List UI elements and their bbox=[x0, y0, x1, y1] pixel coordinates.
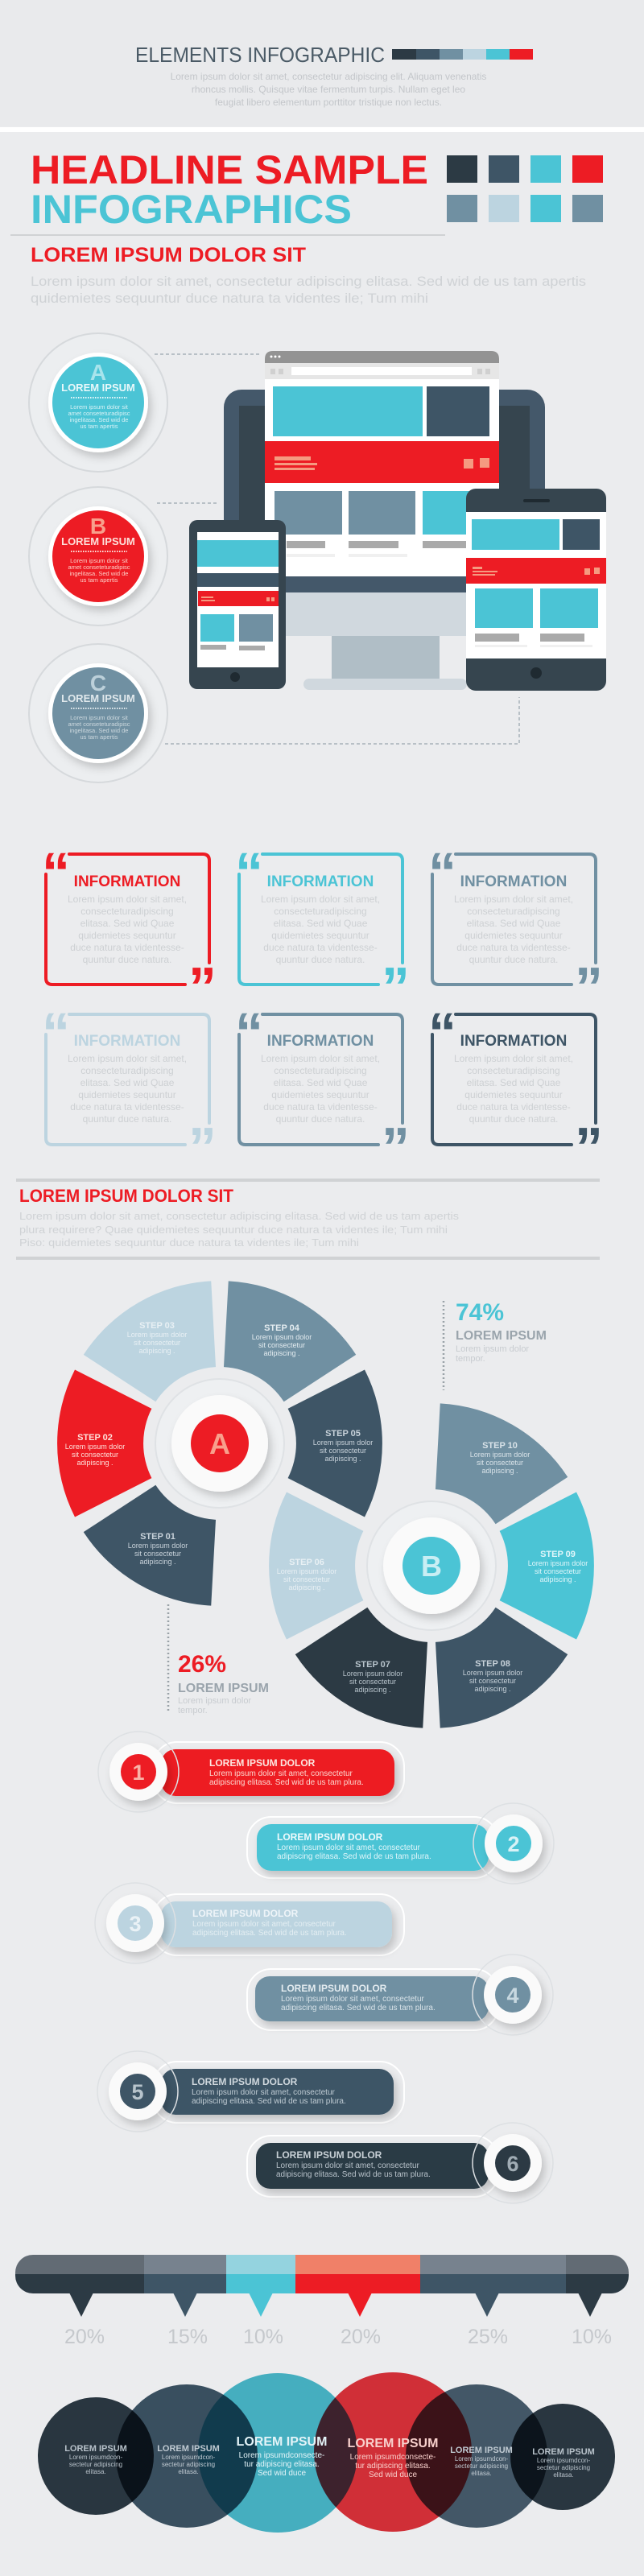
bar 2: 2 bbox=[507, 1832, 520, 1856]
circle C: C bbox=[90, 671, 106, 696]
quote box 1: Lorem ipsum dolor sit amet, bbox=[68, 894, 187, 905]
quote box 2: quidemietes sequuntur bbox=[271, 930, 369, 941]
overlapping circles: tur adipiscing elitasa. bbox=[244, 2460, 320, 2469]
circle C: ingelitasa. Sed wid de bbox=[70, 727, 128, 734]
quote box 6: quuntur duce natura. bbox=[469, 1113, 558, 1125]
overlapping circles: Lorem ipsumdconsecte- bbox=[350, 2453, 436, 2462]
quote box 1: “ bbox=[42, 841, 70, 904]
subheading 1: Lorem ipsum dolor sit amet, consectetur adipiscing elitasa. Sed wid de us tam apertis bbox=[31, 274, 586, 289]
quote box 4: “ bbox=[42, 1001, 70, 1064]
quote box 4: quuntur duce natura. bbox=[83, 1113, 171, 1125]
gear chart A: STEP 05 bbox=[325, 1429, 361, 1439]
header: elements infographic: rhoncus mollis. Quisque vitae fermentum turpis. Nullam eget leo bbox=[192, 84, 465, 95]
bar 3: adipiscing elitasa. Sed wid de us tam plura. bbox=[192, 1929, 347, 1938]
gear chart B: adipiscing . bbox=[481, 1467, 518, 1475]
quote box 6: duce natura ta videntesse- bbox=[456, 1101, 571, 1113]
bar 6: adipiscing elitasa. Sed wid de us tam plura. bbox=[276, 2170, 431, 2179]
title: headline: HEADLINE SAMPLE bbox=[31, 147, 428, 192]
quote box 5 bbox=[235, 1001, 410, 1179]
overlapping circles: Lorem ipsumdcon- bbox=[69, 2454, 122, 2461]
circle B: ingelitasa. Sed wid de bbox=[70, 570, 128, 577]
quote box 5: quuntur duce natura. bbox=[276, 1113, 365, 1125]
bar 1: LOREM IPSUM DOLOR bbox=[209, 1757, 316, 1769]
overlapping circles: LOREM IPSUM bbox=[157, 2444, 220, 2454]
overlapping circles: LOREM IPSUM bbox=[64, 2444, 127, 2454]
monitor bbox=[224, 351, 545, 690]
circle C: amet conseteturadipisc bbox=[68, 720, 130, 728]
quote box 3 bbox=[428, 841, 603, 1018]
subheading 2: Piso: quidemietes sequuntur duce natura ta videntes ile; Tum mihi bbox=[19, 1236, 359, 1249]
subheading 1: quidemietes sequuntur duce natura ta videntes ile; Tum mihi bbox=[31, 291, 428, 306]
quote box 3: Lorem ipsum dolor sit amet, bbox=[454, 894, 573, 905]
quote box 4: quidemietes sequuntur bbox=[78, 1089, 176, 1100]
quote box 5: Lorem ipsum dolor sit amet, bbox=[261, 1053, 380, 1064]
bar 2: Lorem ipsum dolor sit amet, consectetur bbox=[277, 1843, 421, 1852]
bar 5: adipiscing elitasa. Sed wid de us tam plura. bbox=[192, 2097, 346, 2106]
circle A: Lorem ipsum dolor sit bbox=[70, 403, 129, 411]
devices illustration bbox=[189, 351, 606, 691]
gear chart A: A bbox=[209, 1427, 230, 1460]
quote box 3: duce natura ta videntesse- bbox=[456, 942, 571, 953]
gear chart A: Lorem ipsum dolor bbox=[313, 1439, 373, 1447]
connectors bbox=[155, 354, 519, 744]
gear chart A: Lorem ipsum dolor bbox=[252, 1333, 312, 1341]
quote box 6: “ bbox=[428, 1001, 456, 1064]
subheading 2: LOREM IPSUM DOLOR SIT bbox=[19, 1186, 234, 1206]
bar 5: LOREM IPSUM DOLOR bbox=[192, 2076, 298, 2087]
overlapping circles: Sed wid duce bbox=[369, 2471, 417, 2479]
quote box 6: Lorem ipsum dolor sit amet, bbox=[454, 1053, 573, 1064]
gear chart B: STEP 09 bbox=[540, 1550, 576, 1559]
gear chart B: Lorem ipsum dolor bbox=[463, 1669, 522, 1677]
overlapping circles: tur adipiscing elitasa. bbox=[355, 2462, 431, 2471]
gear chart B: sit consectetur bbox=[283, 1575, 330, 1583]
circle A: LOREM IPSUM bbox=[61, 382, 135, 394]
quote box 5: duce natura ta videntesse- bbox=[263, 1101, 378, 1113]
callout 74%: 74% bbox=[456, 1299, 504, 1326]
gear chart A: sit consectetur bbox=[134, 1339, 180, 1347]
bar 2: adipiscing elitasa. Sed wid de us tam plura. bbox=[277, 1852, 431, 1861]
overlapping circles: LOREM IPSUM bbox=[348, 2437, 438, 2450]
gear chart A: STEP 04 bbox=[264, 1323, 300, 1333]
circle A: amet conseteturadipisc bbox=[68, 410, 130, 417]
segmented percentage bar: 25% bbox=[468, 2326, 508, 2348]
quote box 6: consecteturadipiscing bbox=[467, 1065, 560, 1076]
overlapping circles: sectetur adipiscing bbox=[455, 2462, 508, 2470]
gear chart A: adipiscing . bbox=[263, 1349, 300, 1357]
overlapping circles: LOREM IPSUM bbox=[450, 2446, 513, 2455]
gear chart A: Lorem ipsum dolor bbox=[128, 1542, 188, 1550]
quote box 6: ” bbox=[575, 1116, 603, 1179]
quote box 3: quidemietes sequuntur bbox=[464, 930, 563, 941]
bar 3: 3 bbox=[129, 1912, 142, 1936]
gear chart B: STEP 08 bbox=[475, 1659, 510, 1669]
quote box 1 bbox=[42, 841, 217, 1018]
quote box 3: quuntur duce natura. bbox=[469, 954, 558, 965]
phone bbox=[189, 520, 286, 689]
overlapping circles: Sed wid duce bbox=[258, 2469, 306, 2478]
subheading 2: Lorem ipsum dolor sit amet, consectetur adipiscing elitasa. Sed wid de us tam apertis bbox=[19, 1210, 460, 1222]
overlapping circles: Lorem ipsumdcon- bbox=[162, 2454, 215, 2461]
bar 4: adipiscing elitasa. Sed wid de us tam plura. bbox=[281, 2004, 436, 2013]
gear chart A bbox=[57, 1265, 382, 1621]
bar 5: Lorem ipsum dolor sit amet, consectetur bbox=[192, 2088, 336, 2097]
gear chart A: sit consectetur bbox=[320, 1447, 366, 1455]
header: elements infographic: Lorem ipsum dolor sit amet, consectetur adipiscing elit. Aliquam venenatis bbox=[171, 71, 486, 82]
quote boxes bbox=[42, 841, 603, 1179]
quote box 4: Lorem ipsum dolor sit amet, bbox=[68, 1053, 187, 1064]
gear chart A: adipiscing . bbox=[139, 1558, 176, 1566]
gear chart A: sit consectetur bbox=[72, 1451, 118, 1459]
circle A: A bbox=[90, 360, 106, 385]
callout 26%: 26% bbox=[178, 1651, 226, 1678]
quote box 3: “ bbox=[428, 841, 456, 904]
quote box 1: quuntur duce natura. bbox=[83, 954, 171, 965]
overlapping circles: Lorem ipsumdconsecte- bbox=[239, 2451, 324, 2460]
callout 26%: tempor. bbox=[178, 1706, 208, 1715]
bar 4: Lorem ipsum dolor sit amet, consectetur bbox=[281, 1995, 425, 2004]
callout 26%: Lorem ipsum dolor bbox=[178, 1696, 251, 1706]
gear chart A: sit consectetur bbox=[134, 1550, 181, 1558]
gear chart B: sit consectetur bbox=[469, 1677, 516, 1685]
title: headline: INFOGRAPHICS bbox=[31, 187, 352, 232]
overlapping circles: sectetur adipiscing bbox=[162, 2461, 215, 2468]
gear chart A: Lorem ipsum dolor bbox=[127, 1331, 187, 1339]
bar 3: LOREM IPSUM DOLOR bbox=[192, 1908, 299, 1919]
circle A: ingelitasa. Sed wid de bbox=[70, 416, 128, 423]
gear chart B bbox=[269, 1388, 594, 1744]
gear chart A: STEP 01 bbox=[140, 1532, 175, 1542]
header: elements infographic: ELEMENTS INFOGRAPHIC bbox=[135, 43, 385, 67]
gear chart A: STEP 02 bbox=[77, 1433, 113, 1443]
overlapping circles: elitasa. bbox=[85, 2468, 106, 2475]
gear chart B: Lorem ipsum dolor bbox=[528, 1559, 588, 1567]
gear chart B: Lorem ipsum dolor bbox=[343, 1670, 402, 1678]
quote box 1: consecteturadipiscing bbox=[80, 906, 174, 917]
quote box 5: ” bbox=[382, 1116, 410, 1179]
overlapping circles: Lorem ipsumdcon- bbox=[537, 2457, 590, 2464]
quote box 3: INFORMATION bbox=[460, 873, 567, 890]
segmented percentage bar: 10% bbox=[243, 2326, 283, 2348]
bar 4: 4 bbox=[506, 1984, 519, 2008]
bar 6: 6 bbox=[506, 2152, 519, 2176]
circle B: Lorem ipsum dolor sit bbox=[70, 557, 129, 564]
gear chart A: adipiscing . bbox=[324, 1455, 361, 1463]
gear chart B: sit consectetur bbox=[349, 1678, 396, 1686]
quote box 5: “ bbox=[235, 1001, 263, 1064]
quote box 5: elitasa. Sed wid Quae bbox=[274, 1077, 368, 1088]
callout 74%: tempor. bbox=[456, 1354, 485, 1364]
gear chart B: STEP 06 bbox=[289, 1558, 324, 1567]
tablet bbox=[466, 489, 606, 691]
callout 74%: LOREM IPSUM bbox=[456, 1329, 547, 1343]
bar 6: Lorem ipsum dolor sit amet, consectetur bbox=[276, 2161, 420, 2170]
bar 5: 5 bbox=[131, 2080, 144, 2104]
bar 2: LOREM IPSUM DOLOR bbox=[277, 1831, 383, 1843]
subheading 1: LOREM IPSUM DOLOR SIT bbox=[31, 244, 306, 266]
quote box 4: elitasa. Sed wid Quae bbox=[80, 1077, 175, 1088]
bar 6: LOREM IPSUM DOLOR bbox=[276, 2149, 382, 2161]
bar 6 bbox=[247, 2123, 553, 2203]
palette squares bbox=[447, 155, 603, 222]
quote box 6 bbox=[428, 1001, 603, 1179]
quote box 1: quidemietes sequuntur bbox=[78, 930, 176, 941]
gear chart B: adipiscing . bbox=[539, 1575, 576, 1583]
overlapping circles bbox=[38, 2372, 615, 2533]
header: elements infographic: feugiat libero elementum porttitor tristique non lectus. bbox=[215, 97, 442, 108]
callout 26% bbox=[168, 1604, 269, 1715]
header: elements infographic bbox=[135, 43, 533, 108]
gear chart B: Lorem ipsum dolor bbox=[470, 1451, 530, 1459]
quote box 2 bbox=[235, 841, 410, 1018]
segmented percentage bar: 10% bbox=[572, 2326, 612, 2348]
quote box 1: elitasa. Sed wid Quae bbox=[80, 918, 175, 929]
circle C: Lorem ipsum dolor sit bbox=[70, 714, 129, 721]
callout 74% bbox=[444, 1299, 547, 1390]
overlapping circles: Lorem ipsumdcon- bbox=[455, 2455, 508, 2462]
gear chart B: Lorem ipsum dolor bbox=[277, 1567, 336, 1575]
gear chart A: adipiscing . bbox=[138, 1347, 175, 1355]
bar 1: 1 bbox=[132, 1761, 145, 1785]
gear chart B: adipiscing . bbox=[354, 1686, 391, 1694]
segmented percentage bar: 20% bbox=[341, 2326, 381, 2348]
bar 1: Lorem ipsum dolor sit amet, consectetur bbox=[209, 1769, 353, 1778]
overlapping circles: elitasa. bbox=[178, 2468, 199, 2475]
gear chart B: STEP 10 bbox=[482, 1441, 518, 1451]
bar 3 bbox=[95, 1883, 404, 1963]
gear chart B: STEP 07 bbox=[355, 1660, 390, 1670]
overlapping circles: elitasa. bbox=[471, 2470, 492, 2477]
quote box 4 bbox=[42, 1001, 217, 1179]
circle B: us tam apertis bbox=[80, 576, 118, 584]
subheading 1 bbox=[31, 244, 586, 306]
quote box 3: ” bbox=[575, 956, 603, 1018]
quote box 2: INFORMATION bbox=[267, 873, 374, 890]
quote box 3: elitasa. Sed wid Quae bbox=[467, 918, 561, 929]
circle C bbox=[29, 644, 167, 782]
quote box 2: ” bbox=[382, 956, 410, 1018]
overlapping circles: LOREM IPSUM bbox=[532, 2447, 595, 2457]
circle C: us tam apertis bbox=[80, 733, 118, 741]
callout 74%: Lorem ipsum dolor bbox=[456, 1344, 529, 1354]
quote box 4: INFORMATION bbox=[74, 1033, 180, 1050]
numbered bars bbox=[95, 1732, 554, 2203]
quote box 4: consecteturadipiscing bbox=[80, 1065, 174, 1076]
circle B bbox=[29, 487, 167, 625]
bar 5 bbox=[97, 2051, 404, 2132]
quote box 2: consecteturadipiscing bbox=[274, 906, 367, 917]
quote box 2: quuntur duce natura. bbox=[276, 954, 365, 965]
quote box 4: duce natura ta videntesse- bbox=[70, 1101, 184, 1113]
gear chart B: sit consectetur bbox=[535, 1567, 581, 1575]
bar 1 bbox=[98, 1732, 404, 1812]
overlapping circles: sectetur adipiscing bbox=[69, 2461, 122, 2468]
quote box 2: duce natura ta videntesse- bbox=[263, 942, 378, 953]
gear chart B: sit consectetur bbox=[477, 1459, 523, 1467]
quote box 5: quidemietes sequuntur bbox=[271, 1089, 369, 1100]
quote box 2: Lorem ipsum dolor sit amet, bbox=[261, 894, 380, 905]
segmented percentage bar bbox=[15, 2255, 629, 2348]
quote box 5: consecteturadipiscing bbox=[274, 1065, 367, 1076]
overlapping circles: sectetur adipiscing bbox=[537, 2464, 590, 2471]
subheading 2: plura requirere? Quae quidemietes sequuntur duce natura ta videntes ile; Tum mihi bbox=[19, 1224, 448, 1236]
quote box 6: elitasa. Sed wid Quae bbox=[467, 1077, 561, 1088]
circle A: us tam apertis bbox=[80, 423, 118, 430]
quote box 1: ” bbox=[188, 956, 217, 1018]
quote box 3: consecteturadipiscing bbox=[467, 906, 560, 917]
callout 26%: LOREM IPSUM bbox=[178, 1682, 269, 1695]
subheading 2 bbox=[19, 1186, 460, 1249]
bar 1: adipiscing elitasa. Sed wid de us tam plura. bbox=[209, 1778, 364, 1787]
quote box 2: elitasa. Sed wid Quae bbox=[274, 918, 368, 929]
gear chart A: Lorem ipsum dolor bbox=[65, 1443, 125, 1451]
circle C: LOREM IPSUM bbox=[61, 692, 135, 704]
circle B: amet conseteturadipisc bbox=[68, 564, 130, 571]
bar 3: Lorem ipsum dolor sit amet, consectetur bbox=[192, 1920, 336, 1929]
quote box 6: quidemietes sequuntur bbox=[464, 1089, 563, 1100]
title: headline bbox=[31, 147, 428, 232]
quote box 1: duce natura ta videntesse- bbox=[70, 942, 184, 953]
gear chart B: B bbox=[421, 1550, 442, 1583]
bar 4 bbox=[247, 1955, 553, 2035]
segmented percentage bar: 15% bbox=[167, 2326, 208, 2348]
gear chart A: STEP 03 bbox=[139, 1321, 175, 1331]
bar 4: LOREM IPSUM DOLOR bbox=[281, 1983, 387, 1994]
quote box 2: “ bbox=[235, 841, 263, 904]
circle A bbox=[29, 333, 167, 472]
gear chart A: adipiscing . bbox=[76, 1459, 114, 1467]
gear chart B: adipiscing . bbox=[288, 1583, 325, 1591]
overlapping circles: elitasa. bbox=[553, 2471, 574, 2479]
quote box 6: INFORMATION bbox=[460, 1033, 567, 1050]
gear chart A: sit consectetur bbox=[258, 1341, 305, 1349]
quote box 1: INFORMATION bbox=[74, 873, 180, 890]
quote box 4: ” bbox=[188, 1116, 217, 1179]
circle B: LOREM IPSUM bbox=[61, 535, 135, 547]
overlapping circles: LOREM IPSUM bbox=[237, 2435, 327, 2449]
quote box 5: INFORMATION bbox=[267, 1033, 374, 1050]
gear chart B: adipiscing . bbox=[474, 1685, 511, 1693]
circle B: B bbox=[90, 514, 106, 539]
bar 2 bbox=[247, 1803, 554, 1884]
segmented percentage bar: 20% bbox=[64, 2326, 105, 2348]
